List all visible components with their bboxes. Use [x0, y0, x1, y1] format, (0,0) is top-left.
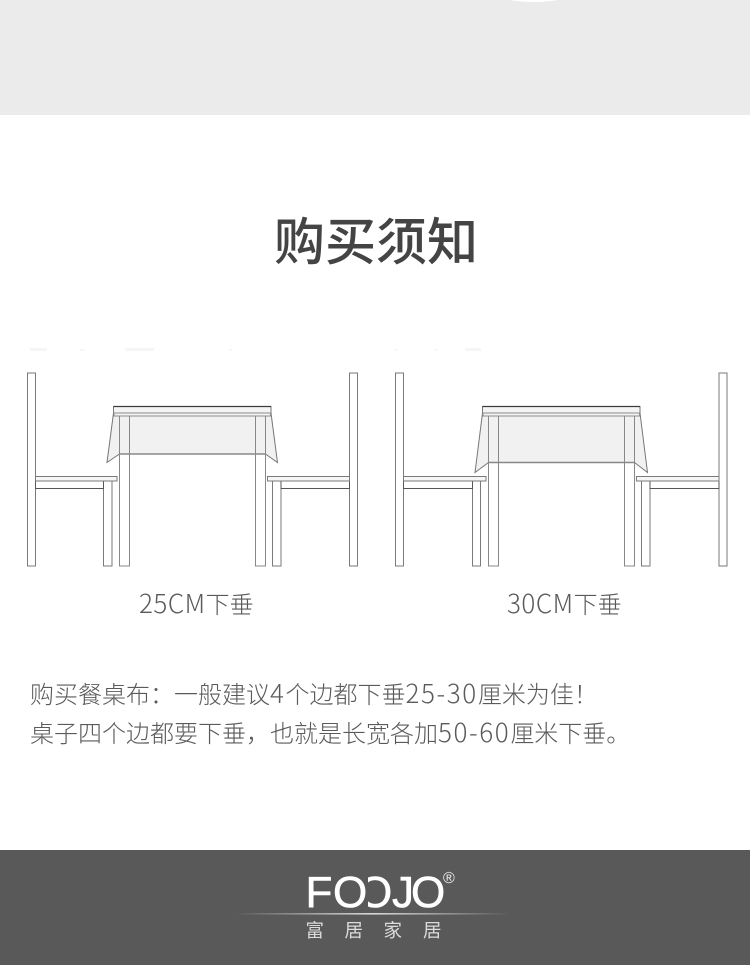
table with 25cm tablecloth	[107, 406, 278, 566]
logo wordmark: JO	[392, 868, 445, 917]
logo tagline: 富	[306, 920, 324, 941]
right chair	[268, 373, 358, 566]
logo tagline: 家	[384, 920, 402, 941]
left chair	[396, 373, 486, 566]
diagram: 25cm drop	[27, 348, 358, 566]
top grey band	[0, 0, 750, 115]
logo wordmark	[308, 876, 444, 908]
logo tagline: 居	[344, 920, 363, 941]
note line 1: 购买餐桌布：一般建议4个边都下垂25-30厘米为佳！	[30, 674, 598, 711]
label: 30cm: 30CM下垂	[507, 584, 622, 621]
registered mark: ®	[443, 870, 455, 887]
note line 2: 桌子四个边都要下垂，也就是长宽各加50-60厘米下垂。	[30, 713, 630, 750]
logo wordmark: O	[358, 868, 392, 917]
footer logo	[244, 872, 501, 939]
table with 30cm tablecloth	[475, 406, 648, 566]
logo divider	[235, 913, 510, 915]
left chair	[28, 373, 117, 566]
logo wordmark: FO	[306, 868, 367, 917]
logo tagline: 居	[423, 920, 442, 941]
footer band	[0, 850, 750, 965]
title: 购买须知	[274, 214, 478, 271]
label: 25cm: 25CM下垂	[139, 584, 254, 621]
diagram: 30cm drop	[394, 348, 728, 566]
right chair	[636, 373, 727, 566]
